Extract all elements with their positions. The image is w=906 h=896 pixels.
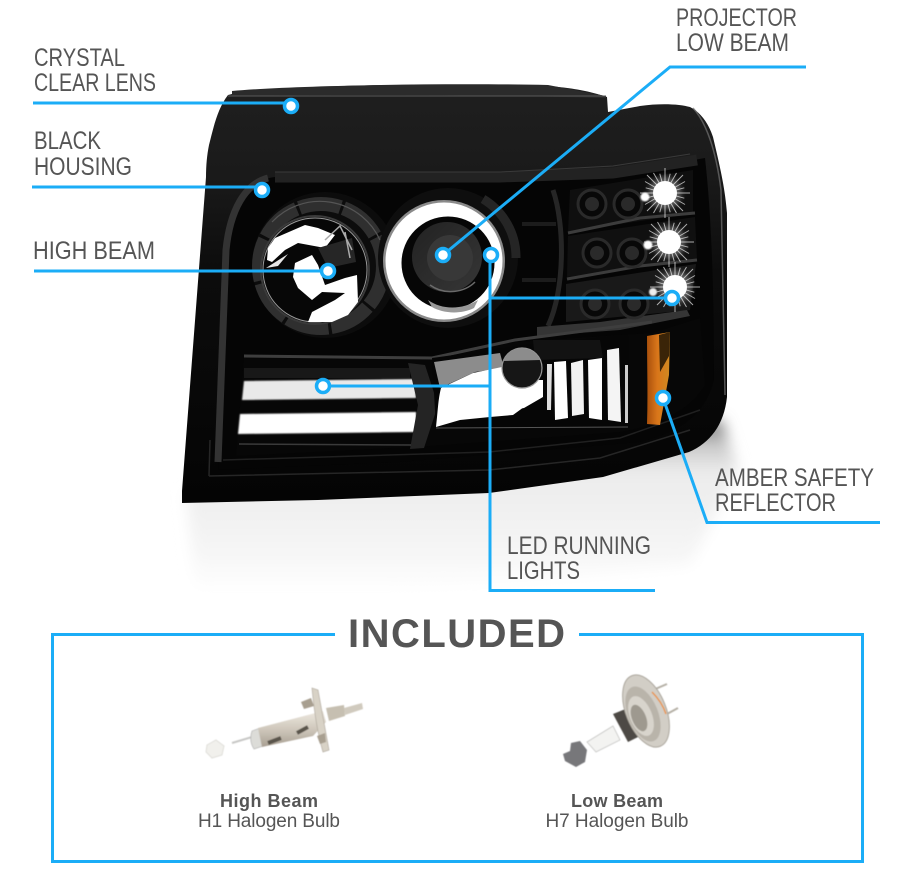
callout: projector low beam: [436, 4, 806, 262]
callout: crystal clear lens: CRYSTAL: [34, 44, 125, 72]
caption: high beam bulb: High Beam: [220, 791, 318, 811]
caption: high beam bulb: H1 Halogen Bulb: [198, 811, 340, 832]
callout: LED running lights: LED RUNNING: [507, 532, 651, 560]
corner reflector: [432, 335, 630, 428]
callout: amber safety reflector: REFLECTOR: [715, 489, 836, 517]
callout: high beam: [33, 237, 334, 278]
icon: H1 bulb: [206, 688, 363, 758]
high beam: [252, 192, 398, 338]
lower section: [236, 318, 705, 456]
callout: amber safety reflector: [656, 392, 880, 522]
callout: projector low beam: PROJECTOR: [676, 4, 797, 32]
callout: projector low beam: LOW BEAM: [676, 29, 789, 57]
icon: H7 bulb: [563, 668, 679, 767]
floor reflection: [186, 420, 738, 592]
callout: amber safety reflector: AMBER SAFETY: [715, 464, 874, 492]
caption: low beam bulb: H7 Halogen Bulb: [546, 811, 688, 832]
included panel: [52, 612, 862, 862]
callout: LED running lights: [316, 248, 678, 590]
lit LED stars: [640, 168, 690, 218]
caption: low beam bulb: Low Beam: [571, 791, 663, 811]
amber reflector: [647, 332, 670, 425]
included heading: INCLUDED: [348, 612, 565, 656]
divider and frame between projector and LEDs: [548, 190, 561, 326]
callout: high beam: HIGH BEAM: [33, 237, 155, 265]
caption: low beam bulb: [546, 791, 688, 832]
lens top edge: [232, 84, 606, 98]
inner bezel recess: [218, 158, 714, 470]
projector low beam: [378, 188, 518, 328]
LED row housing: [537, 168, 700, 336]
callout: LED running lights: LIGHTS: [507, 557, 580, 585]
callout: black housing: HOUSING: [34, 153, 132, 181]
callout: black housing: BLACK: [34, 127, 101, 155]
headlight product illustration: [182, 84, 738, 592]
right glossy rim: [693, 108, 725, 395]
caption: high beam bulb: [198, 791, 340, 832]
reflector highlights: [267, 225, 335, 262]
LED lenses: [578, 190, 606, 218]
LED light bars: [238, 363, 438, 449]
callout: crystal clear lens: [33, 44, 298, 112]
callout: crystal clear lens: CLEAR LENS: [34, 69, 156, 97]
panel frame: [52, 634, 862, 862]
callout: black housing: [32, 127, 268, 196]
housing silhouette: [182, 85, 727, 503]
reflector orb: [502, 348, 542, 388]
